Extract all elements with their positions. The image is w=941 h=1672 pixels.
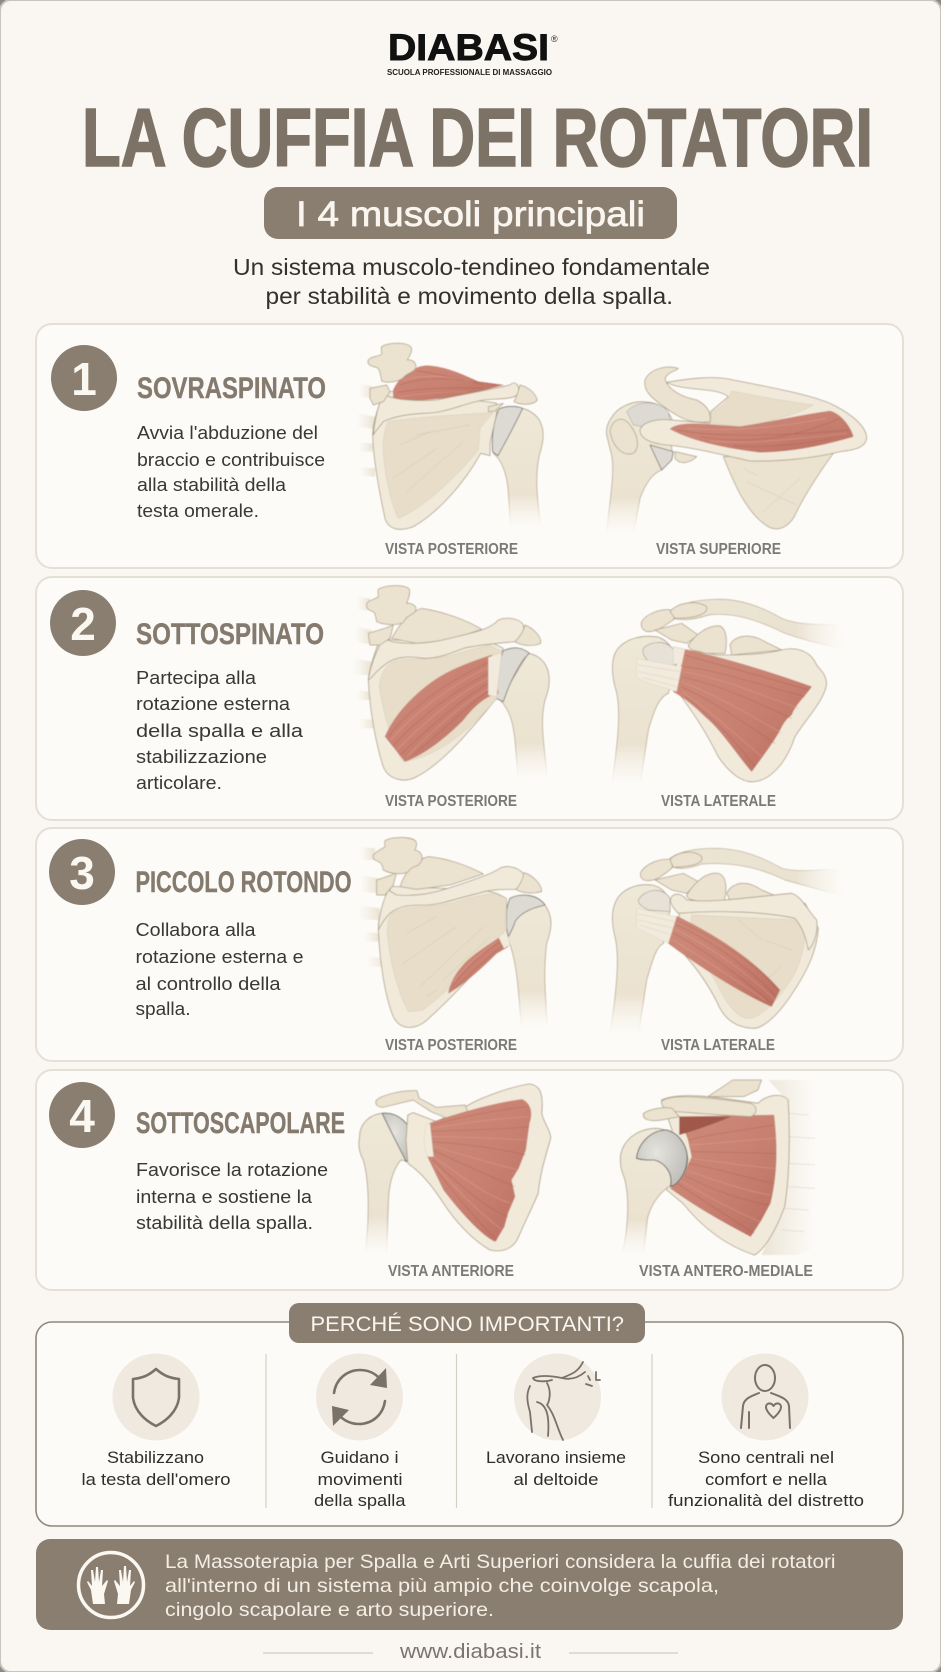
description: Favorisce la rotazione [136, 1159, 328, 1180]
number 2 [50, 590, 116, 656]
benefit: sono centrali: comfort e nella [705, 1470, 828, 1489]
callout text [165, 1551, 836, 1621]
description: spalla. [136, 998, 190, 1019]
description: Partecipa alla [136, 667, 257, 688]
benefit: guidano: Guidano i [320, 1448, 398, 1467]
intro text [233, 254, 710, 309]
benefit: sono centrali: funzionalità del distretto [668, 1491, 864, 1510]
heading: sovraspinato: SOVRASPINATO [137, 372, 326, 405]
illustration: piccolo rotondo lateral view [610, 848, 845, 1035]
label: VISTA POSTERIORE [385, 541, 518, 558]
benefit: guidano: della spalla [314, 1491, 406, 1510]
description: Collabora alla [136, 919, 256, 940]
description: braccio e contribuisce [137, 449, 325, 470]
panel: sottospinato [36, 577, 903, 820]
logo: DIABASI [388, 27, 549, 68]
description: rotazione esterna e [136, 946, 304, 967]
benefit: lavorano insieme: al deltoide [514, 1470, 598, 1489]
panel: perché sono importanti [36, 1303, 903, 1526]
callout text: all'interno di un sistema più ampio che coinvolge scapola, [165, 1575, 719, 1597]
description: articolare. [136, 772, 222, 793]
heading: sottospinato: SOTTOSPINATO [136, 618, 324, 651]
label: VISTA LATERALE [661, 1037, 775, 1054]
benefit: stabilizzano: Stabilizzano [107, 1448, 204, 1467]
description [136, 919, 304, 1019]
section heading: PERCHÉ SONO IMPORTANTI? [310, 1313, 624, 1336]
number 1 [51, 345, 117, 411]
illustration: sovraspinato posterior view [357, 343, 543, 529]
description: stabilizzazione [136, 746, 267, 767]
subtitle pill: I 4 muscoli principali [296, 195, 645, 234]
description [136, 1159, 328, 1233]
benefit: sono centrali [668, 1354, 864, 1510]
panel: piccolo rotondo [36, 828, 903, 1061]
callout text: La Massoterapia per Spalla e Arti Superiori considera la cuffia dei rotatori [165, 1551, 836, 1573]
footer url: www.diabasi.it [399, 1640, 541, 1663]
number 3 [49, 839, 115, 905]
benefit: stabilizzano: la testa dell'omero [82, 1470, 230, 1489]
illustration: sottoscapolare anterior view [359, 1084, 551, 1255]
description: testa omerale. [137, 500, 259, 521]
label: VISTA SUPERIORE [656, 541, 781, 558]
benefit: sono centrali: Sono centrali nel [698, 1448, 834, 1467]
description: interna e sostiene la [136, 1186, 313, 1207]
subtitle pill [264, 187, 677, 239]
icon: shoulder [514, 1354, 601, 1440]
heading: piccolo rotondo: PICCOLO ROTONDO [136, 866, 352, 899]
heading: sottoscapolare: SOTTOSCAPOLARE [136, 1107, 345, 1140]
description: alla stabilità della [137, 474, 287, 495]
illustration: sottospinato lateral view [612, 599, 845, 785]
icon: person with heart [722, 1354, 808, 1440]
panel: sottoscapolare [36, 1070, 903, 1290]
number 2: 2 [70, 598, 96, 650]
description: stabilità della spalla. [136, 1212, 313, 1233]
benefit: stabilizzano [82, 1354, 230, 1489]
illustration: sottoscapolare antero-medial view [620, 1080, 817, 1255]
intro text: Un sistema muscolo-tendineo fondamentale [233, 254, 710, 280]
section heading [289, 1303, 645, 1343]
logo: ® [551, 34, 558, 44]
description: Avvia l'abduzione del [137, 422, 318, 443]
illustration: sovraspinato superior view [606, 367, 867, 533]
description: rotazione esterna [136, 693, 291, 714]
number 1: 1 [71, 353, 97, 405]
description [137, 422, 325, 521]
benefit: lavorano insieme [486, 1354, 626, 1489]
number 4 [49, 1082, 115, 1148]
benefit: guidano [314, 1354, 406, 1510]
illustration: sottospinato posterior view [353, 586, 549, 780]
icon: shield [112, 1354, 200, 1440]
intro text: per stabilità e movimento della spalla. [266, 283, 673, 309]
label: VISTA POSTERIORE [385, 793, 517, 810]
icon: rotation arrows [316, 1354, 403, 1440]
label: VISTA POSTERIORE [385, 1037, 517, 1054]
callout text: cingolo scapolare e arto superiore. [165, 1599, 494, 1621]
callout: massoterapia [36, 1539, 903, 1630]
label: VISTA ANTERIORE [388, 1263, 514, 1280]
label: VISTA ANTERO-MEDIALE [639, 1263, 813, 1280]
number 3: 3 [69, 847, 95, 899]
description [136, 667, 304, 793]
number 4: 4 [69, 1090, 95, 1142]
illustration: piccolo rotondo posterior view [358, 838, 551, 1028]
icon: hands [78, 1552, 144, 1618]
panel: sovraspinato [36, 324, 903, 568]
label: VISTA LATERALE [661, 793, 776, 810]
description: della spalla e alla [136, 720, 304, 741]
benefit: guidano: movimenti [318, 1470, 402, 1489]
logo: SCUOLA PROFESSIONALE DI MASSAGGIO [387, 68, 552, 77]
benefit: lavorano insieme: Lavorano insieme [486, 1448, 626, 1467]
description: al controllo della [136, 973, 281, 994]
